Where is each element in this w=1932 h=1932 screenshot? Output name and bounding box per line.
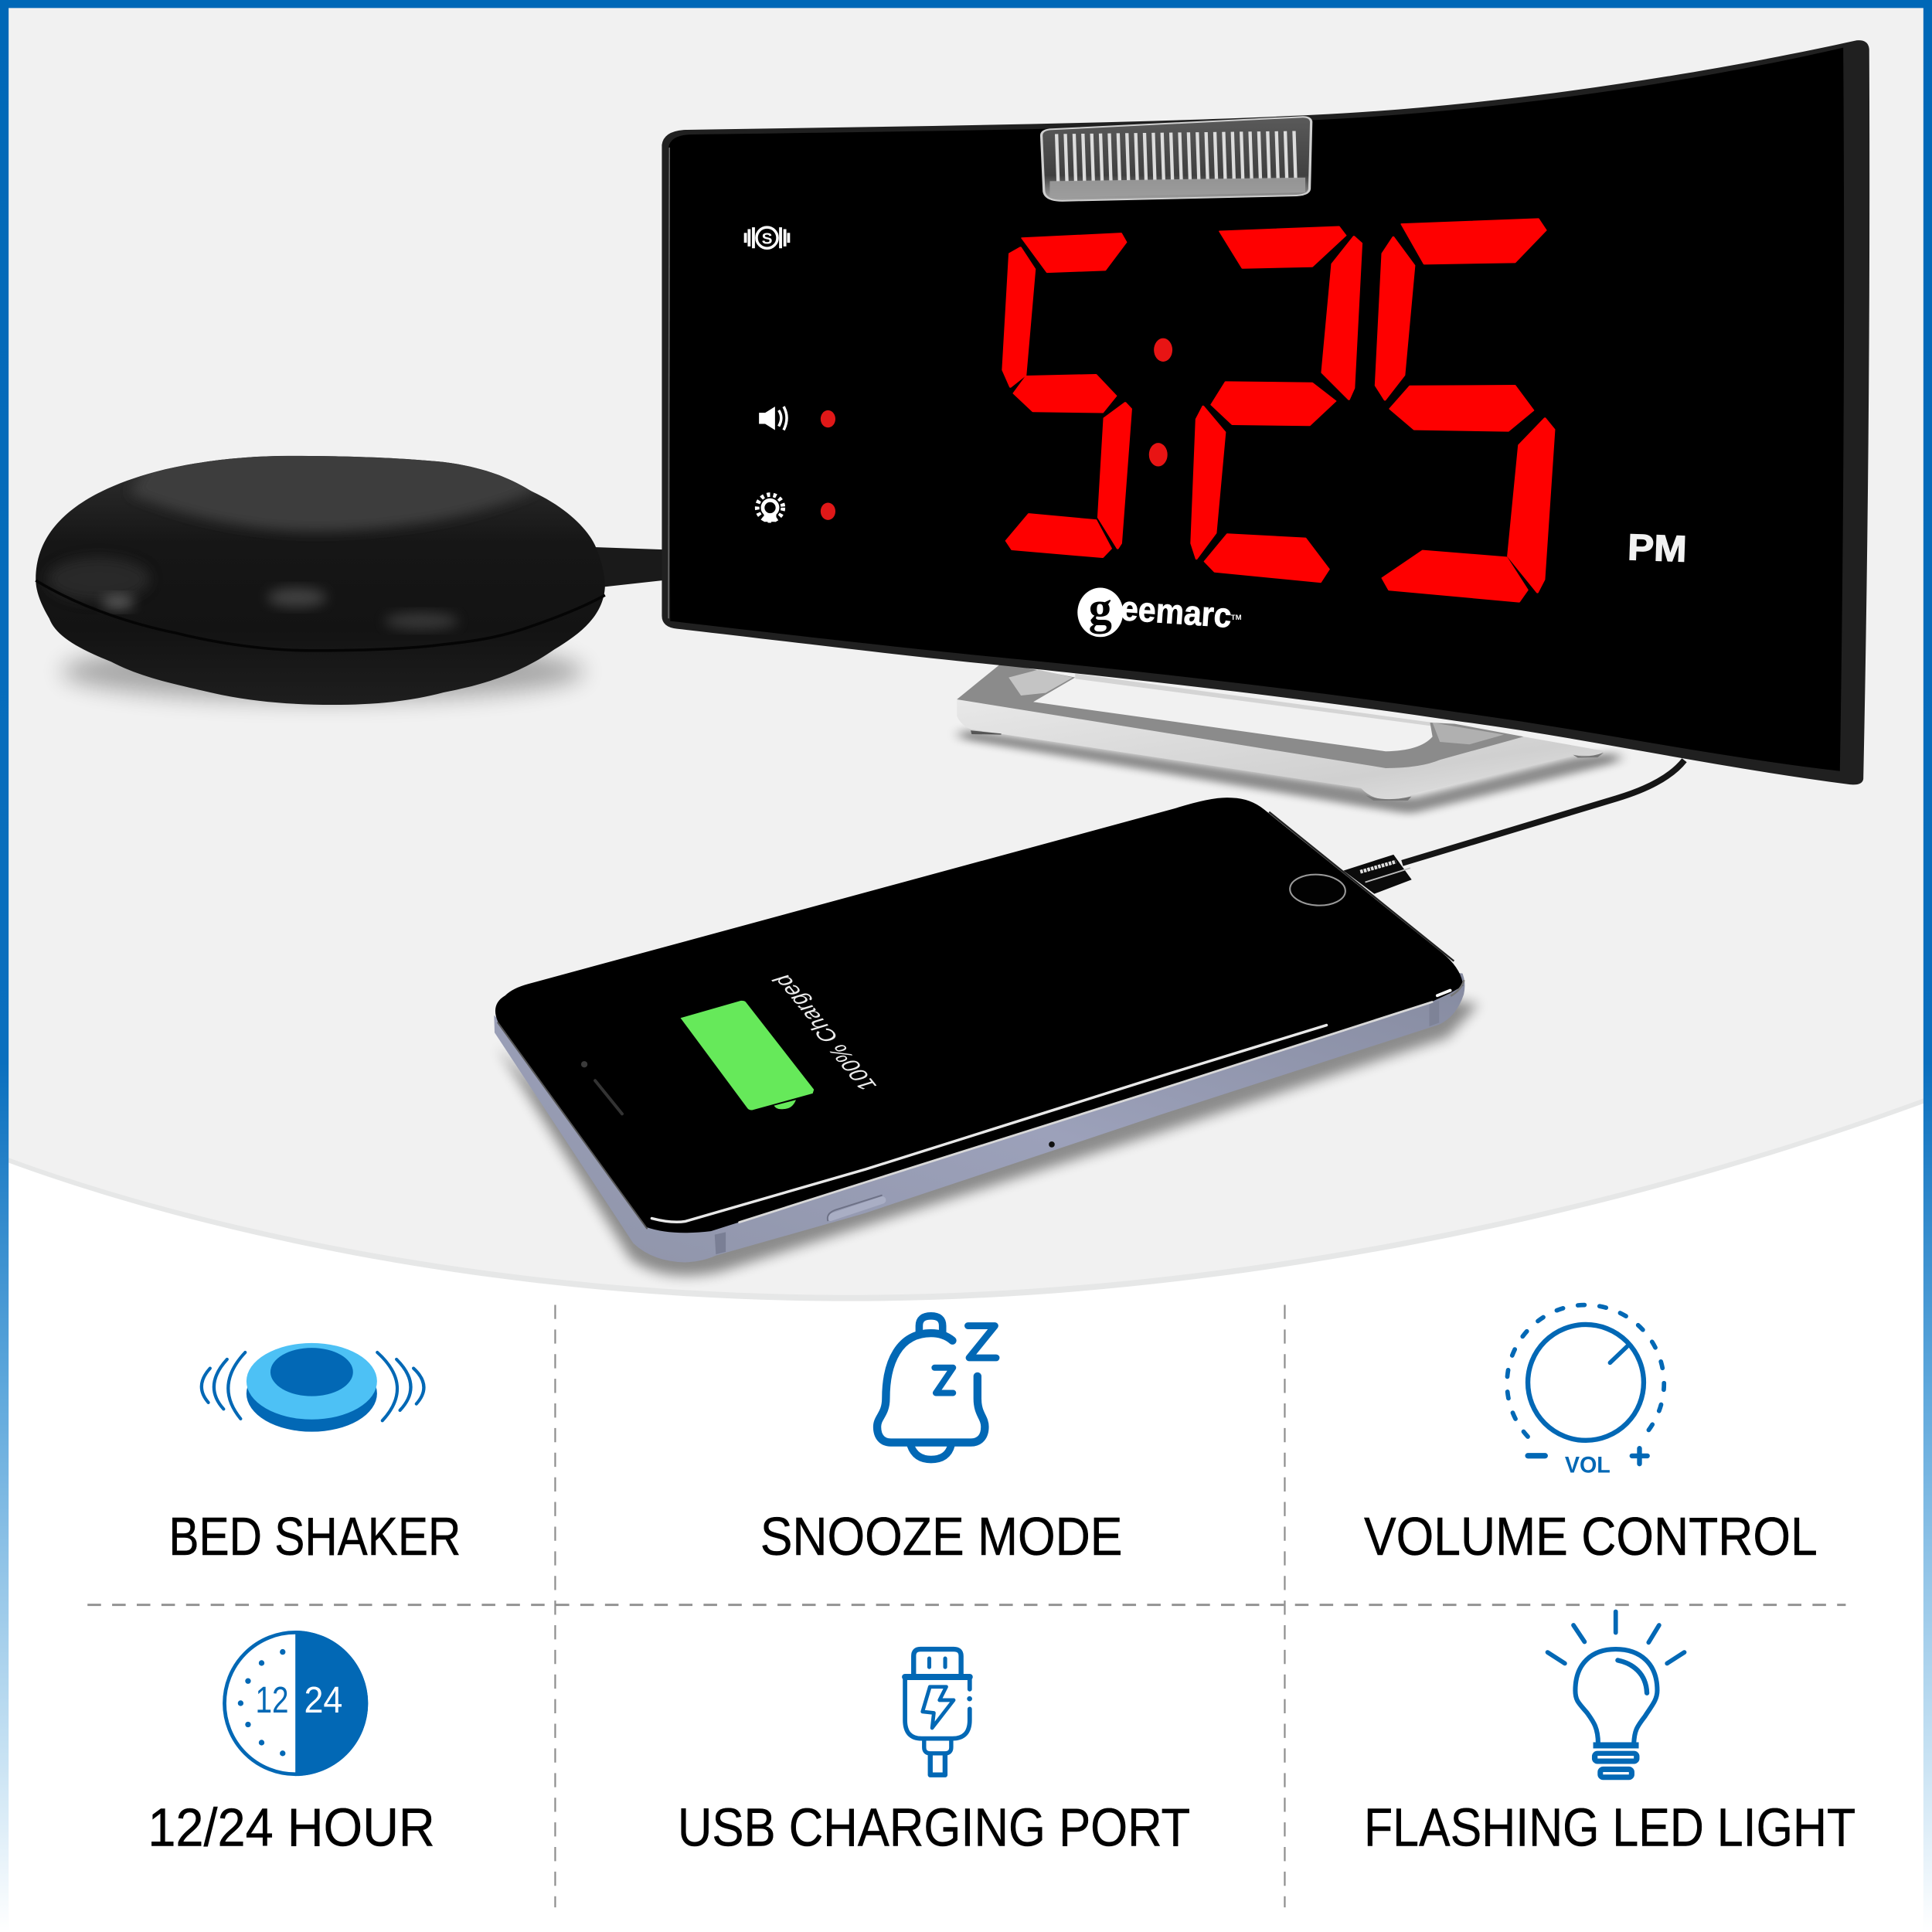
label: FLASHING LED LIGHT — [1364, 1797, 1855, 1857]
side buttons and bands — [715, 1001, 1439, 1254]
smartphone — [494, 798, 1478, 1276]
feature: 12/24 hour — [148, 1631, 435, 1857]
icon: light bulb — [1548, 1611, 1685, 1780]
label: USB CHARGING PORT — [678, 1797, 1190, 1857]
home button — [1289, 873, 1346, 906]
icon: bed shaker — [202, 1343, 423, 1432]
earpiece and camera — [581, 1061, 622, 1114]
icon: light — [757, 495, 783, 522]
icon: shake S — [746, 227, 788, 248]
feature: snooze mode — [760, 1316, 1122, 1566]
icon: usb plug — [905, 1649, 971, 1775]
geemarc logo — [1077, 583, 1242, 637]
icon: snooze bell — [877, 1316, 996, 1460]
clock cable — [1402, 760, 1685, 863]
label: BED SHAKER — [168, 1506, 461, 1566]
flashing light bar — [1042, 117, 1311, 201]
grid dividers — [87, 1304, 1845, 1907]
label: SNOOZE MODE — [760, 1506, 1122, 1566]
time display 5:25 — [1003, 219, 1554, 602]
icon: 12/24 clock: 12 — [256, 1680, 289, 1721]
feature: flashing led light — [1364, 1611, 1855, 1857]
icon: speaker — [759, 406, 787, 430]
colon dots — [1149, 338, 1172, 466]
feature: volume control — [1364, 1305, 1818, 1566]
icon: 12/24 clock: 24 — [304, 1680, 342, 1721]
usb connector — [1269, 812, 1454, 961]
icon: shake S: S — [762, 230, 773, 248]
phone side edge — [494, 961, 1464, 1262]
bed shaker device — [36, 444, 663, 705]
label: 12/24 HOUR — [148, 1797, 435, 1857]
geemarc logo: TM — [1231, 614, 1242, 622]
label: VOLUME CONTROL — [1364, 1506, 1818, 1566]
battery — [681, 1001, 814, 1111]
icon: volume knob: VOL — [1565, 1452, 1611, 1478]
geemarc logo: eemarc — [1120, 590, 1233, 635]
indicator dots — [821, 410, 835, 520]
feature: bed shaker — [168, 1343, 461, 1566]
phone shadow — [498, 986, 1478, 1276]
battery label: 100% Charged — [767, 972, 883, 1094]
curved alarm clock — [662, 40, 1869, 784]
screen highlights — [498, 981, 1464, 1229]
clock stand — [957, 663, 1617, 814]
geemarc logo: g — [1089, 583, 1112, 634]
PM label: PM — [1627, 527, 1688, 570]
phone screen — [495, 798, 1463, 1233]
clock body — [662, 40, 1869, 784]
feature: usb charging port — [678, 1649, 1190, 1857]
icon: volume knob — [1507, 1305, 1664, 1478]
icon: 12/24 clock — [224, 1631, 368, 1776]
